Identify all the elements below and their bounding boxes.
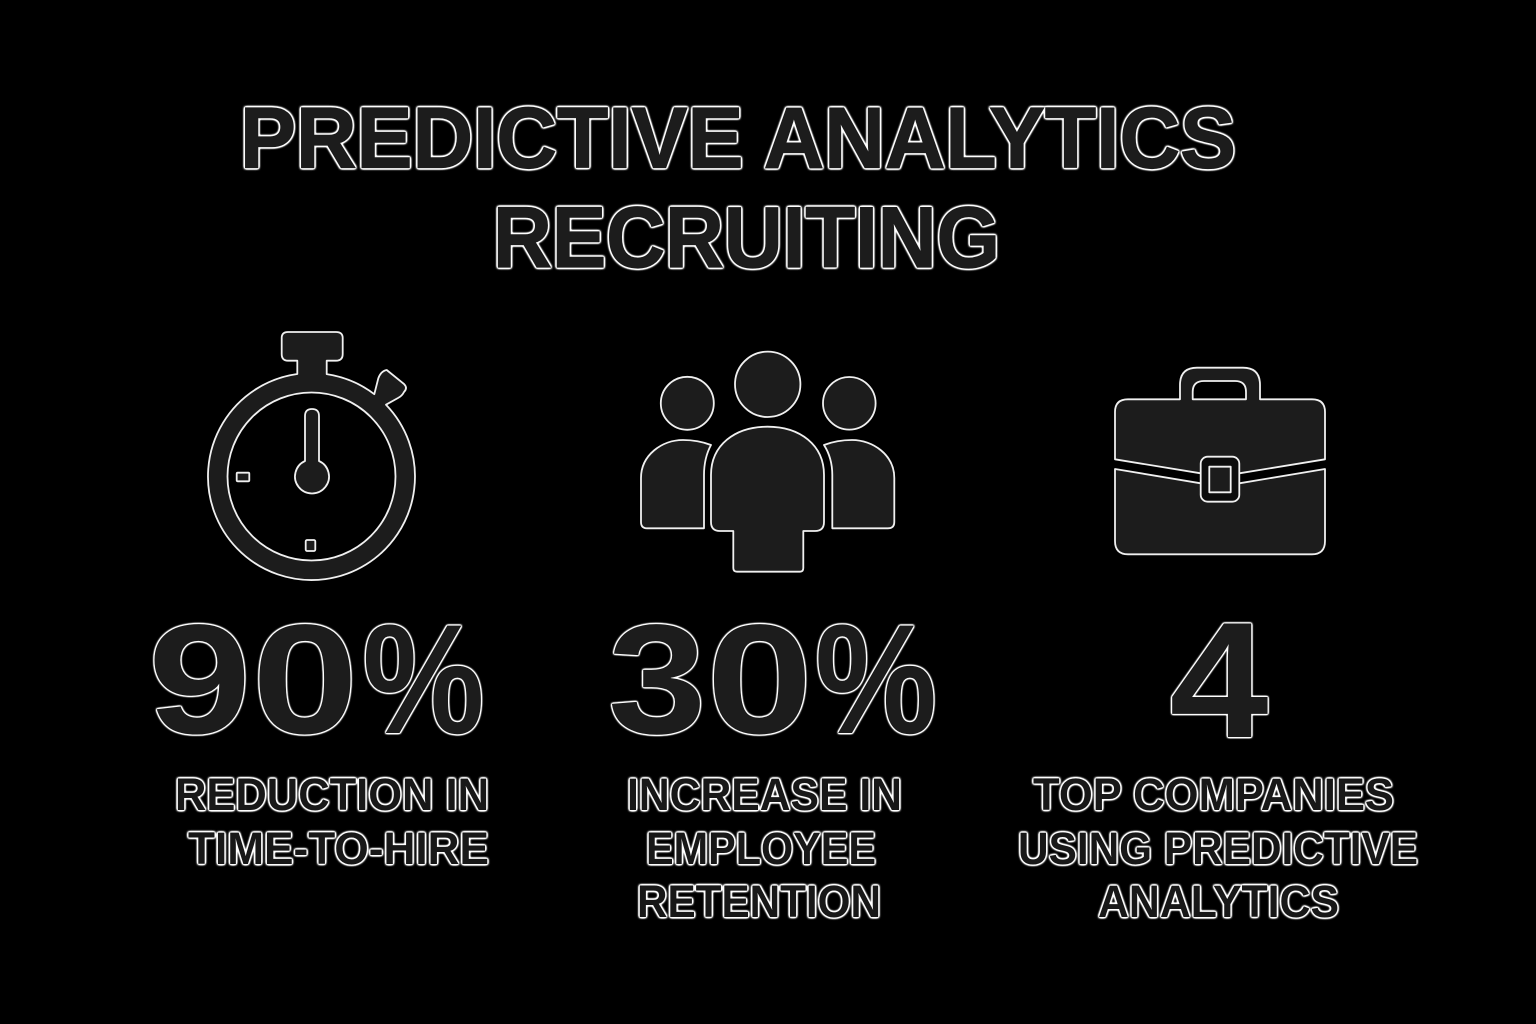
label: top companies using predictive analytics: ANALYTICS: [1098, 876, 1339, 927]
label: top companies using predictive analytics: TOP COMPANIES: [1033, 769, 1394, 820]
icon: group of people: [641, 352, 894, 572]
number: 30%: 0: [706, 593, 813, 767]
number: 90%: 9: [148, 593, 251, 767]
title: [240, 90, 1236, 286]
number: 30%: %: [815, 593, 937, 767]
number: 4: 4: [1170, 588, 1268, 772]
label: reduction in time-to-hire: REDUCTION IN: [175, 769, 489, 820]
icon: briefcase: [1115, 368, 1325, 554]
label: increase in employee retention: RETENTION: [637, 876, 881, 927]
label: top companies using predictive analytics: USING PREDICTIVE: [1018, 823, 1418, 874]
title: RECRUITING: [493, 190, 1000, 286]
label: increase in employee retention: [627, 769, 902, 927]
label: increase in employee retention: EMPLOYEE: [646, 823, 876, 874]
label: increase in employee retention: INCREASE IN: [627, 769, 902, 820]
label: reduction in time-to-hire: [175, 769, 489, 874]
panel: time-to-hire stat: [148, 332, 489, 874]
label: reduction in time-to-hire: TIME-TO-HIRE: [188, 823, 489, 874]
panel: employee retention stat: [608, 352, 937, 927]
number: 90%: %: [362, 593, 484, 767]
panel: top companies stat: [1018, 368, 1418, 927]
label: top companies using predictive analytics: [1018, 769, 1418, 927]
number: 90%: 0: [252, 593, 358, 767]
number: 90%: [148, 593, 484, 767]
number: 30%: 3: [608, 593, 706, 767]
title: PREDICTIVE ANALYTICS: [240, 90, 1236, 186]
number: 30%: [608, 593, 937, 767]
icon: stopwatch: [208, 332, 415, 580]
